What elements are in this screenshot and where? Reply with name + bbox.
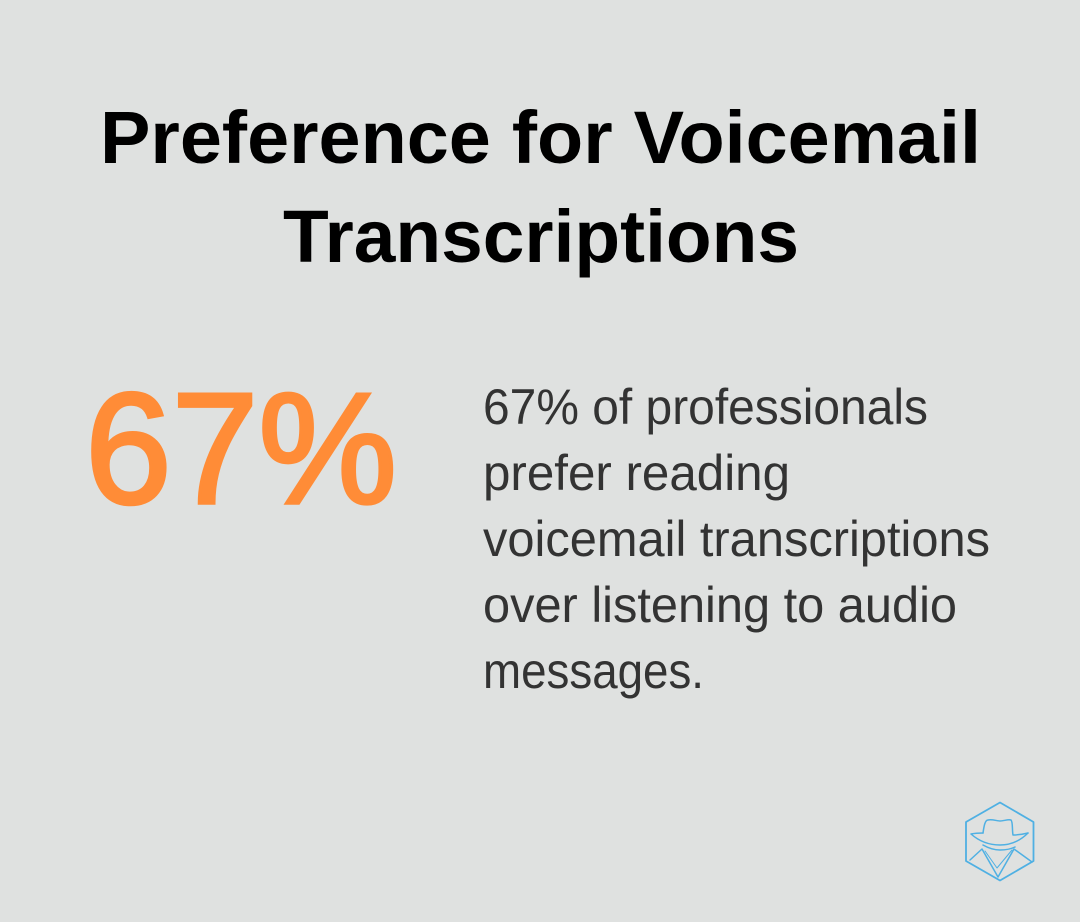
title: Preference for Voicemail bbox=[100, 96, 981, 179]
description text: over listening to audio bbox=[483, 577, 957, 633]
description text bbox=[483, 379, 990, 699]
icon: hat brim bbox=[971, 833, 1028, 850]
icon: inner lapel bbox=[985, 850, 1012, 868]
icon: hat crown bbox=[983, 820, 1028, 835]
big statistic: 67%: 67% bbox=[85, 361, 397, 537]
description text: prefer reading bbox=[483, 445, 790, 501]
title: Transcriptions bbox=[283, 195, 799, 278]
description text: voicemail transcriptions bbox=[483, 511, 990, 567]
description text: messages. bbox=[483, 643, 704, 699]
title bbox=[100, 96, 981, 278]
description text: 67% of professionals bbox=[483, 379, 928, 435]
icon: hexagon outline bbox=[966, 802, 1034, 880]
icon: coat and collar bbox=[970, 849, 1032, 877]
icon: hexagon logo with hat-wearing spy bbox=[966, 802, 1034, 880]
